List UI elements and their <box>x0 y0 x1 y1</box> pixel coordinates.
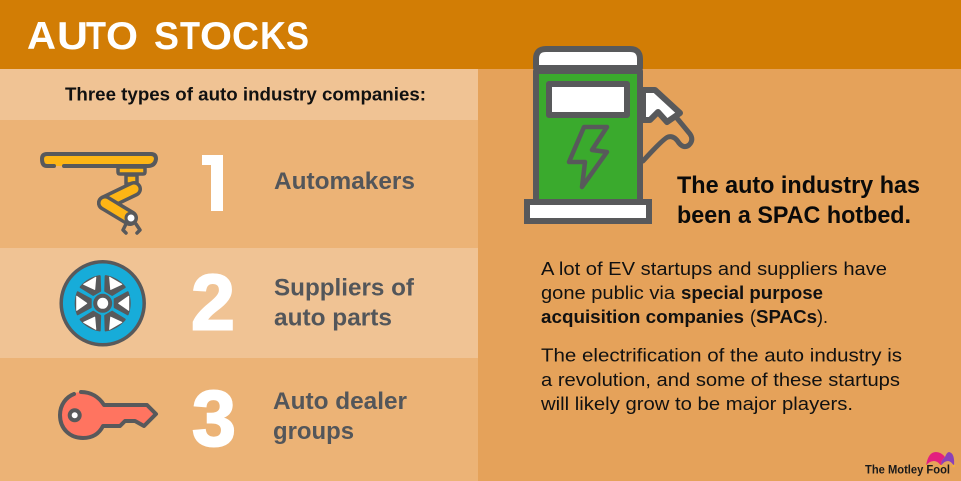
icon: jester hat <box>925 452 955 467</box>
text block: SPAC explanation: ). <box>817 307 828 327</box>
icon: robotic arm <box>42 154 156 233</box>
title: O <box>200 15 232 58</box>
right panel background <box>478 69 961 481</box>
icon: wheel <box>61 262 144 345</box>
title: T <box>180 15 200 58</box>
label: suppliers: auto parts <box>274 304 392 332</box>
callout heading: been a SPAC hotbed. <box>677 202 911 229</box>
title: S <box>286 15 309 58</box>
title: K <box>260 15 286 58</box>
title: A <box>27 15 56 58</box>
text block: SPAC explanation: SPACs <box>756 307 817 327</box>
title: C <box>232 15 259 58</box>
title: U <box>57 15 88 58</box>
number 1 <box>202 155 223 211</box>
logo: The Motley Fool: The Motley Fool <box>865 464 950 476</box>
label: automakers: Automakers <box>274 168 415 195</box>
panel: row 3 dealers <box>0 358 478 481</box>
text block: SPAC explanation: ( <box>750 307 756 327</box>
panel: intro row <box>0 69 478 120</box>
logo: The Motley Fool <box>865 452 955 476</box>
text block: electrification: a revolution, and some of these startups <box>541 370 900 390</box>
title: S <box>154 15 179 58</box>
text block: SPAC explanation: A lot of EV startups and suppliers have <box>541 259 887 279</box>
text block: SPAC explanation: acquisition companies <box>541 307 744 327</box>
text block: SPAC explanation: gone public via <box>541 283 676 303</box>
header band <box>0 0 961 69</box>
text block: SPAC explanation: special purpose <box>681 283 823 303</box>
callout heading: The auto industry has <box>677 172 920 199</box>
wheel spokes <box>76 274 130 332</box>
number 3: 3 <box>192 374 236 462</box>
panel: row 2 suppliers <box>0 248 478 358</box>
text block: electrification: will likely grow to be major players. <box>540 394 853 414</box>
panel: row 1 automakers <box>0 120 478 248</box>
icon: key <box>60 392 156 438</box>
title: T <box>86 15 106 58</box>
icon: EV charging pump <box>527 49 692 221</box>
label: suppliers: Suppliers of <box>274 274 415 302</box>
panel: intro row: Three types of auto industry companies: <box>65 84 426 104</box>
number 1: 1 <box>195 142 238 228</box>
number 2: 2 <box>191 258 235 346</box>
text block: electrification: The electrification of the auto industry is <box>541 346 902 366</box>
label: dealers: groups <box>273 418 354 445</box>
label: dealers: Auto dealer <box>273 388 407 415</box>
title: O <box>106 15 138 58</box>
